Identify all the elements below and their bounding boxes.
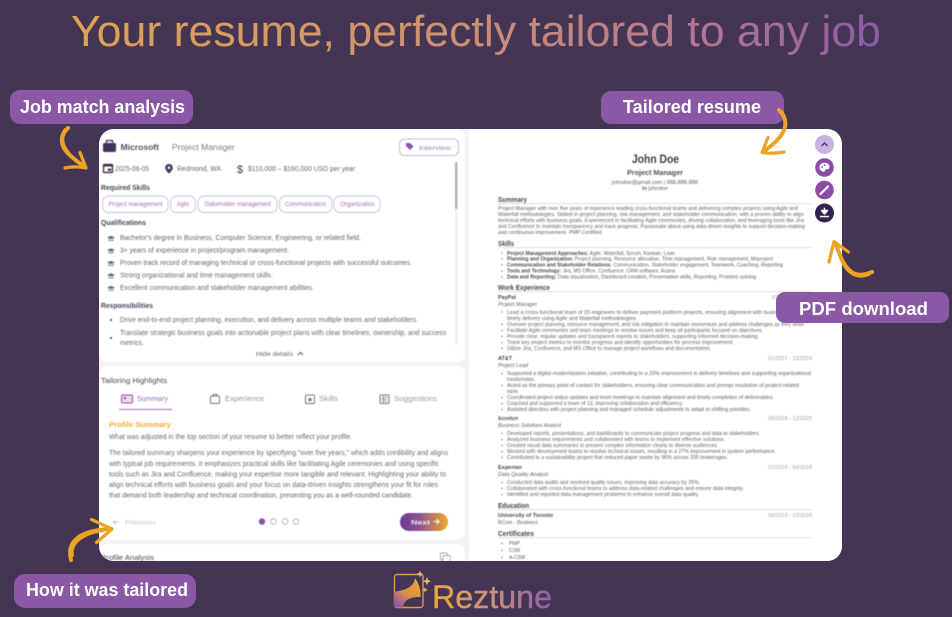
job: paypal: 07/2024 - Present	[772, 295, 812, 301]
previous button	[112, 519, 156, 525]
tab: experience	[210, 394, 264, 404]
skill chip labels: Stakeholder management	[204, 202, 271, 208]
job: accenture: Developed reports, presentations, and dashboards to communicate project progress and data to stakeholders.	[507, 431, 760, 437]
qualifications list	[107, 235, 412, 292]
summary paragraph: with typical job requirements. It emphasizes practical skills like facilitating Agile ceremonies and using specific	[108, 461, 439, 468]
resume section: certificates: CSM	[509, 548, 520, 554]
qualifications list: 3+ years of experience in project/program management.	[120, 248, 289, 254]
resume section: skills: Project Management Approaches: Agile, Waterfall, Scrum, Kanban, Lean	[507, 251, 675, 257]
logo wordmark: Reztune	[432, 579, 552, 615]
tab: skills	[306, 395, 339, 404]
job: at&t: Acted as the primary point of contact for stakeholders, ensuring clear communication and prompt resolution of project-related	[507, 383, 799, 389]
icon: copy	[440, 553, 450, 562]
summary paragraph: The tailored summary sharpens your experience by specifying "over five years," which adds credibility and aligns	[109, 450, 448, 457]
panel: profile analysis card: Profile Analysis	[101, 553, 154, 562]
button: download	[815, 204, 834, 222]
resume section: summary: Waterfall methodologies. Skilled in project planning, risk management, and stakeholder communication, with a proven ability to align	[498, 212, 804, 218]
scrollbar	[455, 162, 458, 345]
qualifications list: Proven track record of managing technical or cross-functional projects with successful outcomes.	[120, 260, 412, 267]
icon: dollar: $	[237, 164, 243, 176]
panel: tailoring highlights card	[99, 366, 465, 540]
job: accenture	[498, 416, 812, 461]
resume section: skills: Planning and Organization: Project planning, Resource allocation, Time management, Risk management, Msproject	[507, 257, 773, 263]
tab: summary: Summary	[137, 396, 169, 403]
next button	[400, 513, 448, 531]
button: edit	[815, 181, 834, 199]
skill chip labels: Agile	[177, 202, 190, 208]
job: accenture: Contributed to a sustainability project that reduced paper waste by 96% across 200 brokerages.	[507, 455, 728, 461]
label: pdf download: PDF download	[799, 299, 928, 319]
job: paypal: Track key project metrics to monitor progress and identify opportunities for process improvement.	[507, 340, 734, 346]
job: paypal: Project Manager	[498, 302, 537, 308]
resume header: John Doe	[632, 152, 679, 166]
panel: resume	[469, 129, 842, 561]
summary paragraph: align technical efforts with business goals and your focus on data-driven insights strengthens your fit for roles	[109, 482, 438, 489]
resume section: summary: technical efforts with business goals. Experienced in facilitating Agile ceremonies, driving collaboration, and leveraging tools like Jira	[498, 218, 804, 224]
previous button: Previous	[125, 520, 157, 526]
next button: Next	[411, 520, 431, 526]
job: at&t: Coached and supported a team of 12, improving collaboration and efficiency.	[507, 401, 683, 407]
summary paragraph: tools such as Jira and Confluence, making your expertise more tangible and relevant. Highlighting your ability to	[109, 472, 446, 478]
job: at&t: Supported a digital modernization initiative, contributing to a 20% improvement in delivery timelines and supporting organizational	[507, 371, 811, 377]
label: how it was tailored	[14, 574, 196, 608]
job: accenture: Worked with development teams to resolve technical issues, resulting in a 27% improvement in system performance.	[507, 449, 776, 455]
interview tag button	[400, 139, 458, 156]
logo icon	[394, 570, 431, 608]
skill chip labels	[108, 202, 375, 208]
job: experian: Experian	[498, 465, 522, 471]
tab: summary	[119, 395, 172, 410]
company: Microsoft	[120, 142, 159, 152]
resume section: education: BCom - Business	[498, 520, 538, 526]
label: job match analysis: Job match analysis	[20, 97, 185, 117]
job: paypal: Oversee project planning, resource management, and risk mitigation to maintain momentum and address challenges as they arise.	[507, 322, 805, 328]
responsibilities list	[110, 317, 446, 347]
job: paypal: timely delivery using Agile and Waterfall methodologies.	[507, 316, 637, 322]
resume section: skills: Skills	[498, 241, 514, 248]
resume section: summary: and continuous improvement. PMP Certified.	[498, 230, 603, 236]
pagination dots	[259, 518, 299, 525]
arrow: tailored resume	[762, 110, 786, 153]
hide details toggle	[256, 351, 304, 357]
label: tailored resume: Tailored resume	[623, 97, 761, 117]
qualifications list: Excellent communication and stakeholder management abilities.	[120, 285, 314, 292]
button: collapse	[815, 135, 834, 154]
resume section: education: 09/2013 - 12/2016	[768, 513, 812, 519]
panel: app window	[99, 129, 842, 574]
job: paypal: Facilitate Agile ceremonies and team meetings to resolve issues and keep all participants focused on objectives.	[507, 328, 763, 334]
job: at&t: inquiries.	[507, 389, 519, 395]
resume section: summary: Summary	[498, 197, 527, 204]
action buttons	[815, 135, 834, 222]
job: at&t: 01/2022 - 12/2023	[768, 356, 812, 362]
qualifications list: Bachelor's degree in Business, Computer Science, Engineering, or related field.	[120, 235, 361, 242]
job: experian: Conducted data audits and resolved quality issues, improving data accuracy by 35%.	[507, 480, 700, 486]
job: experian: 07/2016 - 04/2018	[768, 465, 812, 471]
job: at&t: transformation.	[507, 377, 535, 383]
job: accenture: Analyzed business requirements and collaborated with teams to implement effective solutions.	[507, 437, 725, 443]
arrow: how it was tailored	[70, 520, 112, 560]
job: experian	[498, 465, 812, 498]
resume section: certificates	[498, 531, 812, 561]
responsibilities list: Translate strategic business goals into actionable project plans with clear timelines, ownership, and success	[120, 330, 446, 337]
title: Your resume, perfectly tailored to any job	[71, 7, 881, 56]
skill chip labels: Project management	[108, 202, 163, 208]
job title: Project Manager	[172, 142, 235, 152]
interview tag button: Interview	[419, 145, 451, 152]
summary paragraph: that demand both leadership and technical coordination, presenting you as a well-rounded candidate.	[109, 492, 413, 500]
qualifications list: Strong organizational and time management skills.	[120, 272, 273, 280]
job: paypal	[498, 295, 812, 352]
logo	[394, 570, 552, 615]
resume section: education	[498, 503, 812, 526]
label: job match analysis	[10, 90, 193, 124]
job: paypal: Provide clear, regular updates and transparent reports to stakeholders, supporting informed decision-making.	[507, 334, 759, 340]
resume header: Project Manager	[627, 168, 683, 177]
job: at&t	[498, 356, 812, 413]
heading: required skills: Required Skills	[101, 185, 150, 192]
skill chip labels: Organization	[340, 202, 375, 208]
tab: suggestions: Suggestions	[394, 396, 438, 403]
resume section: summary: and Confluence to maintain transparency and track progress. Passionate about using data-driven insights to support decision-making	[498, 224, 805, 230]
button: palette	[815, 158, 834, 177]
job: at&t: Project Lead	[498, 363, 529, 369]
resume header: johndoe@gmail.com | 888-888-888	[611, 180, 698, 186]
job: accenture: 05/2018 - 12/2022	[768, 416, 812, 422]
arrow: pdf download	[829, 242, 872, 277]
responsibilities list: Drive end-to-end project planning, execution, and delivery across multiple teams and stakeholders.	[120, 317, 418, 324]
heading: tailoring highlights: Tailoring Highlights	[101, 376, 167, 385]
resume section: skills: Tools and Technology: Jira, MS Office, Confluence, CRM software, Asana	[507, 269, 675, 275]
label: how it was tailored: How it was tailored	[26, 580, 188, 600]
resume section: work experience	[498, 285, 812, 498]
location: Redmond, WA	[177, 166, 221, 173]
panel: job match card	[99, 129, 465, 362]
skill chips	[102, 196, 380, 212]
tab: experience: Experience	[225, 396, 264, 403]
job: paypal: Lead a cross-functional team of 20 engineers to deliver payment platform projects, ensuring alignment with business goals and	[507, 310, 810, 316]
heading: profile summary: Profile Summary	[109, 420, 172, 429]
job: experian: Collaborated with cross-functional teams to address data-related challenges and ensure data integrity.	[507, 486, 744, 492]
job: at&t: Assisted directors with project planning and managed schedule adjustments to adapt to shifting priorities.	[507, 407, 751, 413]
resume header: in johndoe	[642, 186, 668, 192]
job: paypal: PayPal	[498, 295, 516, 301]
label: pdf download	[776, 292, 949, 323]
job: experian: Identified and reported data management problems to enhance overall data quality.	[507, 492, 699, 498]
resume section: work experience: Work Experience	[498, 285, 550, 292]
skill chip labels: Communication	[285, 202, 326, 208]
job: accenture: Business Solutions Analyst	[498, 423, 561, 429]
summary paragraph	[108, 450, 448, 500]
resume section: certificates: A-CSM	[509, 555, 525, 561]
job: experian: Data Quality Analyst	[498, 472, 549, 478]
arrow: job match	[61, 128, 86, 168]
hide details toggle: Hide details	[256, 351, 294, 358]
icon: briefcase	[103, 140, 116, 152]
resume section: skills: Communication and Stakeholder Relations: Communication, Stakeholder engagement, Teamwork, Coaching, Reporting	[507, 263, 783, 269]
label: tailored resume	[601, 91, 784, 124]
job: accenture: Created visual data summaries to present complex information clearly to diverse audiences.	[507, 443, 718, 449]
resume section: skills	[498, 241, 812, 280]
tab: skills: Skills	[319, 396, 339, 403]
job: at&t: Coordinated project status updates and team meetings to maintain alignment and timely completion of deliverables.	[507, 395, 774, 401]
heading: responsibilities: Responsibilities	[101, 303, 153, 310]
resume section: summary	[498, 197, 812, 236]
resume section: certificates: Certificates	[498, 531, 534, 538]
icon: calendar	[104, 164, 112, 172]
resume section: education: University of Toronto	[498, 513, 553, 519]
heading: qualifications: Qualifications	[101, 220, 146, 227]
icon: location pin	[165, 164, 173, 174]
tab: suggestions	[380, 395, 438, 404]
job: accenture: Accenture	[498, 416, 519, 422]
resume section: skills: Data and Reporting: Data visualization, Dashboard creation, Presentation skills, Reporting, Problem solving	[507, 274, 756, 280]
resume section: summary: Project Manager with over five years of experience leading cross-functional teams and delivering complex projects using Agile and	[498, 206, 798, 212]
job: paypal: Utilize Jira, Confluence, and MS Office to manage project workflows and documentation.	[507, 346, 711, 352]
panel: profile analysis card	[99, 544, 464, 561]
job: at&t: AT&T	[498, 356, 512, 362]
resume section: certificates: PMP	[509, 541, 520, 547]
subtitle: What was adjusted in the top section of your resume to better reflect your profile.	[109, 434, 352, 441]
salary: $110,000 – $160,000 USD per year	[248, 166, 356, 173]
date: 2025-06-05	[115, 166, 149, 173]
responsibilities list: metrics.	[120, 340, 144, 347]
resume header	[611, 152, 698, 192]
resume section: education: Education	[498, 503, 529, 510]
